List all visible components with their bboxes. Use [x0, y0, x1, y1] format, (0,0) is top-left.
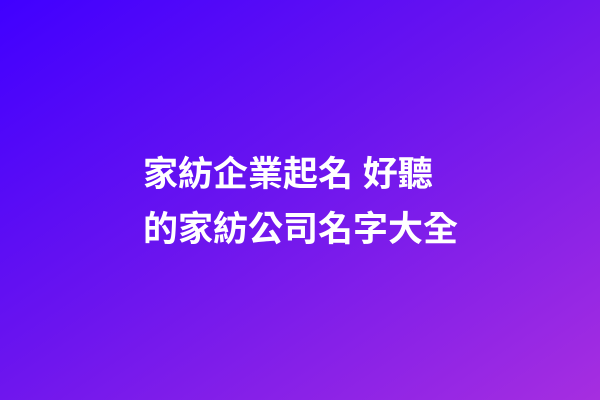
title: 的家紡公司名字大全: [143, 210, 458, 249]
title: [143, 155, 458, 249]
title: 家紡企業起名 好聽: [143, 155, 433, 194]
